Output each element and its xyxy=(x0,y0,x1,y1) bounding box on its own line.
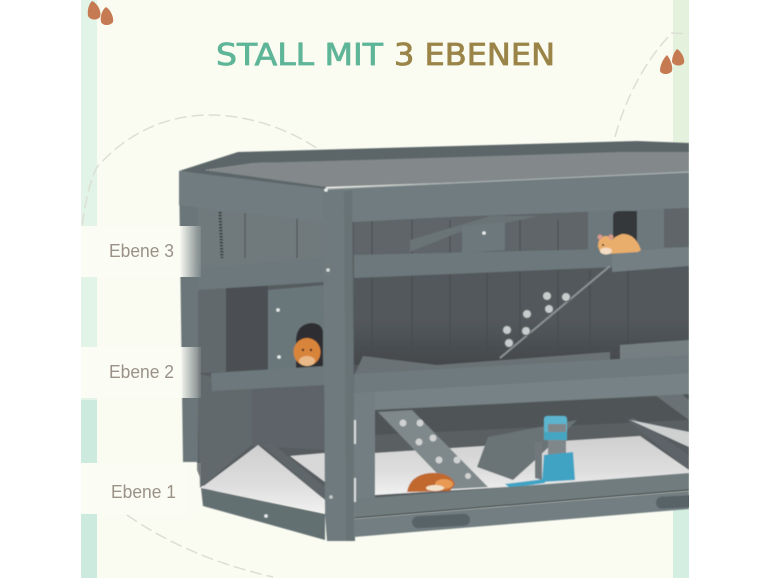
corner post xyxy=(323,190,355,541)
level 2 floor plates xyxy=(354,352,610,376)
hutch xyxy=(179,141,696,541)
upper ramp xyxy=(500,266,610,358)
title xyxy=(216,38,555,73)
level 3 ledge left xyxy=(197,258,325,290)
front left base xyxy=(201,488,325,540)
shelf level 2 xyxy=(211,366,325,391)
lower chamber floor xyxy=(375,436,689,495)
dark shadow below level 3 xyxy=(354,262,689,372)
dashed decorative arcs xyxy=(82,33,689,577)
icon: almonds top left xyxy=(88,1,113,25)
label: Ebene 1 xyxy=(81,463,201,514)
water bottle xyxy=(505,416,575,488)
paw prints xyxy=(502,292,570,348)
hamster level 3 xyxy=(598,234,641,254)
label: Ebene 2 xyxy=(81,347,201,398)
level 3 left wall xyxy=(197,205,325,270)
background xyxy=(81,0,689,578)
screws xyxy=(276,308,281,359)
level 2 dark recess xyxy=(197,285,268,373)
level 3 back box and ramp xyxy=(410,216,540,252)
roof front band xyxy=(179,171,689,222)
icon: almonds top right xyxy=(660,49,684,74)
wall planks xyxy=(245,210,628,445)
level 3 shelf xyxy=(354,247,689,278)
left lower wall xyxy=(197,373,252,488)
door handles xyxy=(412,495,696,529)
title: STALL MIT xyxy=(216,38,384,73)
title: 3 EBENEN xyxy=(394,38,555,73)
door left frame xyxy=(354,393,375,518)
base rail xyxy=(354,491,689,537)
right edge mask xyxy=(689,0,770,578)
level 3 spring xyxy=(220,212,222,258)
front upper beam xyxy=(354,355,689,393)
lower chamber back wall xyxy=(375,395,689,446)
box door xyxy=(296,323,323,368)
label: Ebene 3 xyxy=(81,226,201,277)
lower chamber ramp xyxy=(477,420,577,480)
label: Ebene 2: Ebene 2 xyxy=(109,362,174,382)
level 1 back rail and floor left xyxy=(201,445,325,513)
lower ramp with paws xyxy=(378,410,488,489)
level 3 back wall xyxy=(354,200,689,258)
hamster level 1 xyxy=(407,473,455,492)
interior back wall xyxy=(197,195,689,500)
label: Ebene 3: Ebene 3 xyxy=(109,241,174,261)
nesting box level 2 xyxy=(268,285,325,371)
level 3 nest box xyxy=(588,209,664,250)
roof mesh xyxy=(205,152,689,187)
roof back rim xyxy=(179,141,689,191)
left post xyxy=(179,171,198,462)
front lower beam xyxy=(354,373,689,412)
right lower side rail xyxy=(627,418,689,470)
label: Ebene 1: Ebene 1 xyxy=(111,482,176,502)
hamster level 2 xyxy=(294,338,320,366)
door bottom frame xyxy=(356,473,689,518)
